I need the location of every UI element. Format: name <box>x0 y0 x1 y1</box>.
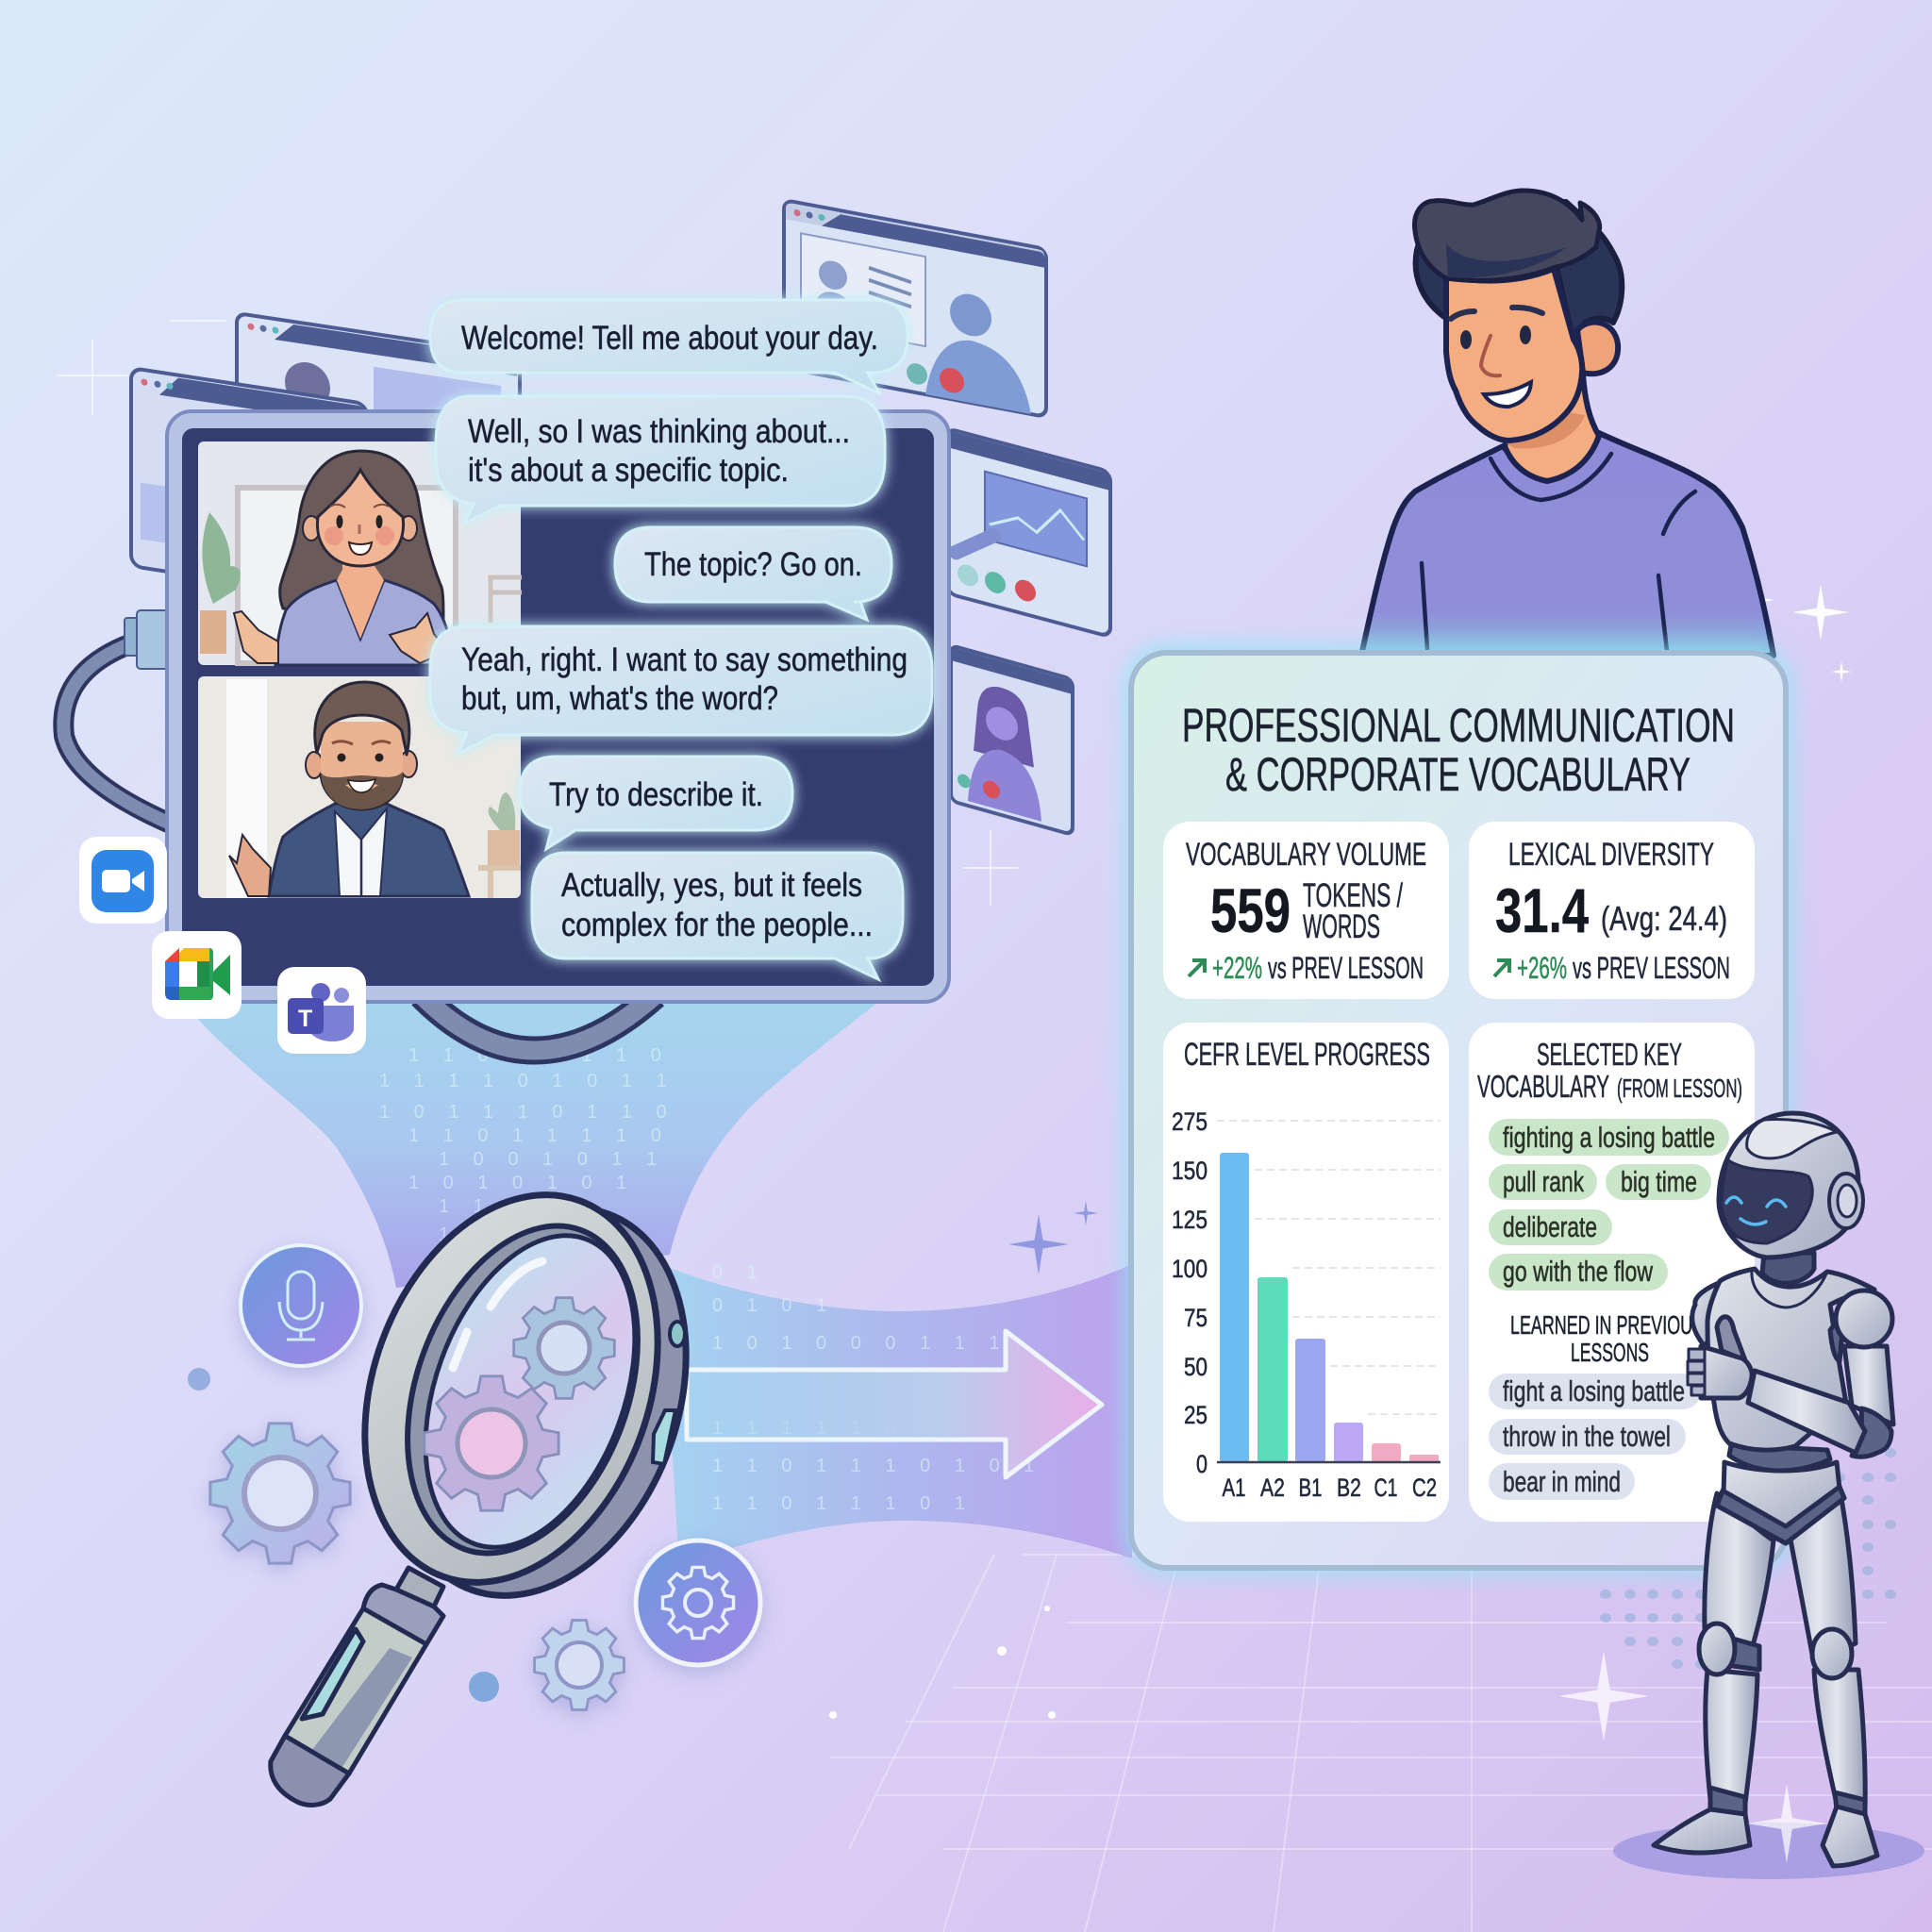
binary digits in funnel <box>379 1045 667 1245</box>
binary digits in stream: 1 1 0 1 1 1 0 1 0 1 <box>712 1456 1034 1476</box>
lens <box>365 1194 680 1585</box>
arm right <box>1748 1291 1893 1457</box>
ring back <box>341 1167 738 1637</box>
binary digits in funnel: 1 0 1 1 1 0 1 1 0 <box>379 1102 667 1123</box>
horizontal data stream <box>660 1264 1132 1566</box>
learned heading: LEARNED IN PREVIOUS <box>1510 1310 1704 1340</box>
card: vocabulary volume: 559 <box>1210 875 1291 945</box>
card: lexical diversity: vs PREV LESSON <box>1573 951 1730 985</box>
vocabulary pills: previous lessons <box>1489 1374 1701 1500</box>
legs <box>1654 1489 1877 1866</box>
card: selected key vocabulary: VOCABULARY <box>1477 1069 1609 1104</box>
eyes and brows <box>1451 308 1542 375</box>
card: selected key vocabulary: (FROM LESSON) <box>1617 1074 1742 1103</box>
bubble 2: it's about a specific topic. <box>468 452 789 489</box>
hair front <box>1415 191 1600 280</box>
window right with chart <box>947 428 1110 637</box>
bar chart: A2 <box>1260 1474 1285 1502</box>
icon: gear small <box>535 1621 624 1709</box>
panel title: & CORPORATE VOCABULARY <box>1225 748 1690 801</box>
binary digits in stream: 0 1 0 1 <box>712 1295 826 1316</box>
decorative sparkles <box>57 321 1852 1741</box>
binary digits in funnel: 1 1 0 1 1 1 1 0 <box>408 1125 661 1146</box>
binary digits in funnel: 1 1 1 1 0 1 0 1 1 <box>379 1071 667 1091</box>
bar chart: C2 <box>1412 1474 1437 1502</box>
bubble 4: but, um, what's the word? <box>461 680 778 717</box>
icon: microphone <box>241 1245 361 1366</box>
card: lexical diversity: 31.4 <box>1495 875 1589 945</box>
vocabulary pills: previous lessons: fight a losing battle <box>1503 1374 1685 1407</box>
sweater details <box>1422 454 1695 651</box>
icon: google meet <box>152 931 242 1019</box>
bar chart: B2 <box>1337 1474 1361 1502</box>
bubble 1 <box>430 300 908 393</box>
binary digits in funnel: 1 1 1 1 <box>439 1224 553 1245</box>
bubble 2: Well, so I was thinking about... <box>468 413 850 450</box>
ground shadow <box>1613 1823 1924 1879</box>
card: vocabulary volume: TOKENS / <box>1303 877 1403 914</box>
dot <box>188 1368 210 1391</box>
bar chart: B1 <box>1298 1474 1323 1502</box>
binary digits in funnel: 1 1 1 1 1 <box>439 1196 588 1217</box>
lens gear upper <box>514 1298 614 1398</box>
sparkle over robot foot <box>1747 1784 1826 1863</box>
bubble 4 <box>430 626 932 754</box>
main video call window <box>167 300 949 1002</box>
icon: microsoft teams: T <box>298 1006 312 1032</box>
bubble 5: Try to describe it. <box>549 776 763 813</box>
vocabulary pills: current lesson: fighting a losing battle <box>1503 1121 1715 1154</box>
bubble 1: Welcome! Tell me about your day. <box>461 320 878 357</box>
learned heading <box>1510 1310 1704 1367</box>
bubble 4: Yeah, right. I want to say something <box>461 641 908 678</box>
face <box>1446 269 1582 441</box>
vocabulary pills: current lesson: pull rank <box>1503 1165 1584 1198</box>
binary digits in funnel: 1 0 0 1 0 1 1 <box>439 1149 657 1170</box>
side buttons <box>670 1322 685 1346</box>
binary digits in stream: 1 0 1 0 0 0 1 1 1 <box>712 1333 1000 1354</box>
neck <box>1505 375 1599 481</box>
bar chart: 150 <box>1172 1157 1208 1185</box>
halftone dots <box>1600 1448 1896 1669</box>
data stream funnel <box>179 998 883 1288</box>
icon: microsoft teams <box>277 967 366 1054</box>
panel title <box>1182 699 1735 801</box>
bar chart: 25 <box>1184 1401 1208 1429</box>
cable <box>63 610 655 1051</box>
bar chart: 0 <box>1196 1450 1208 1478</box>
bubble 6: complex for the people... <box>561 907 873 943</box>
card: selected key vocabulary: SELECTED KEY <box>1537 1037 1682 1072</box>
sweater <box>1361 433 1774 656</box>
ring front <box>313 1154 709 1624</box>
bubble 5 <box>520 757 792 849</box>
bubble 6 <box>532 853 903 979</box>
results panel <box>1124 644 1792 1574</box>
bar chart: 275 <box>1172 1108 1208 1136</box>
card: lexical diversity <box>1469 822 1755 999</box>
card: lexical diversity: (Avg: 24.4) <box>1601 899 1727 938</box>
card: vocabulary volume: WORDS <box>1303 908 1380 945</box>
binary digits in funnel: 1 1 0 1 1 1 1 0 <box>408 1045 661 1066</box>
vocabulary pills: current lesson: go with the flow <box>1503 1255 1653 1288</box>
icon: gear disc <box>636 1541 760 1665</box>
robot <box>1613 1113 1924 1879</box>
card: lexical diversity: LEXICAL DIVERSITY <box>1508 837 1714 873</box>
bar chart: A1 <box>1223 1474 1245 1502</box>
window left <box>131 368 367 602</box>
lens gear lower <box>425 1376 558 1510</box>
icon: zoom <box>79 837 167 924</box>
window top right <box>784 200 1046 417</box>
binary digits in stream: 1 1 1 1 1 0 <box>712 1418 896 1439</box>
window right with woman <box>951 645 1073 835</box>
card: lexical diversity: +26% <box>1517 951 1567 985</box>
hair back <box>1416 202 1622 341</box>
card: vocabulary volume: +22% <box>1212 951 1262 985</box>
torso <box>1707 1269 1874 1450</box>
person <box>1361 191 1774 656</box>
card: CEFR level progress <box>1163 1023 1449 1522</box>
floor grid <box>830 1555 1932 1932</box>
card: vocabulary volume: VOCABULARY VOLUME <box>1186 837 1426 873</box>
bar chart: 50 <box>1184 1353 1208 1381</box>
left shoulder <box>1692 1281 1724 1346</box>
card: selected key vocabulary <box>1469 1023 1755 1522</box>
bar chart: C1 <box>1374 1474 1398 1502</box>
icon: gear left <box>210 1424 350 1563</box>
bar chart: 125 <box>1172 1206 1208 1234</box>
bubble 2 <box>436 396 885 524</box>
pelvis <box>1724 1462 1840 1530</box>
background video windows <box>131 200 1110 835</box>
chat bubbles <box>430 300 932 979</box>
smile <box>1484 382 1531 407</box>
waist <box>1729 1445 1830 1471</box>
lens highlights <box>453 1261 542 1368</box>
binary digits in funnel: 1 0 1 0 1 0 1 <box>408 1173 626 1193</box>
vocabulary pills: current lesson: big time <box>1621 1165 1697 1198</box>
bar chart: 100 <box>1172 1255 1208 1283</box>
vocabulary pills: current lesson <box>1489 1119 1729 1291</box>
bar chart: 75 <box>1184 1304 1208 1332</box>
arrow <box>687 1331 1102 1477</box>
dot <box>469 1672 499 1702</box>
magnifying glass <box>271 1154 738 1805</box>
bar chart <box>1172 1108 1441 1502</box>
vocabulary pills: current lesson: deliberate <box>1503 1210 1597 1243</box>
card: vocabulary volume <box>1163 822 1449 999</box>
head <box>1719 1113 1863 1257</box>
binary digits in stream: 0 1 <box>712 1262 758 1283</box>
learned heading: LESSONS <box>1571 1338 1649 1367</box>
binary digits in stream <box>712 1262 1034 1514</box>
video tile: man <box>198 676 521 898</box>
vocabulary pills: previous lessons: bear in mind <box>1503 1465 1621 1498</box>
vocabulary pills: previous lessons: throw in the towel <box>1503 1420 1671 1453</box>
window back left <box>237 313 520 544</box>
video tile: woman <box>198 441 522 665</box>
neck <box>1762 1253 1814 1283</box>
binary digits in stream: 1 1 0 1 1 1 0 1 <box>712 1493 965 1514</box>
bubble 3: The topic? Go on. <box>644 546 862 583</box>
bubble 3 <box>615 527 891 620</box>
ear <box>1577 323 1618 374</box>
collar line <box>1752 1271 1827 1307</box>
handle <box>271 1568 443 1805</box>
card: CEFR level progress: CEFR LEVEL PROGRESS <box>1184 1037 1430 1073</box>
hand thumbs up <box>1688 1317 1752 1398</box>
bubble 6: Actually, yes, but it feels <box>561 867 862 904</box>
card: vocabulary volume: vs PREV LESSON <box>1268 951 1424 985</box>
